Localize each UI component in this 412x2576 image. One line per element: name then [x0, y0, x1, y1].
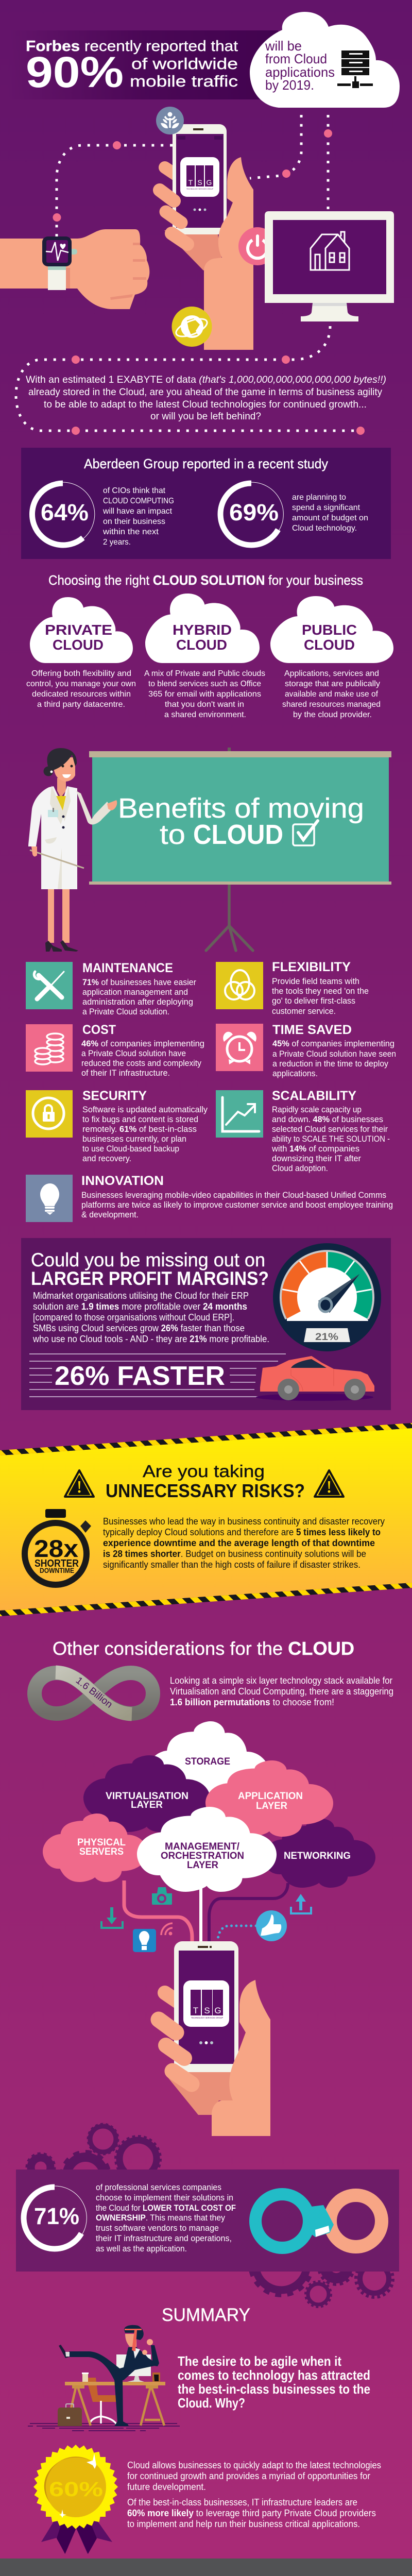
phone with TSG logo: TECHNOLOGY SERVICES GROUP [186, 188, 213, 190]
cloud: public [270, 596, 393, 663]
icon: infinity 1.6 billion [35, 1672, 153, 1714]
text: summary question: the best-in-class businesses to the [178, 2381, 370, 2397]
icon: globe [172, 307, 212, 347]
icon: coin stacks [35, 1033, 63, 1064]
cloud: networking: NETWORKING [284, 1851, 351, 1861]
text: 64% detail: within the next [102, 528, 159, 536]
cloud: networking [263, 1819, 375, 1888]
illustration: red car [256, 1356, 374, 1401]
benefit: scalability: and down. 48% of businesses [272, 1114, 383, 1124]
icon: stopwatch 28x: DOWNTIME [40, 1566, 74, 1574]
text: cost of ownership: OWNERSHIP. This means that they [96, 2213, 225, 2223]
intro paragraph: to be able to adapt to the latest Cloud technologies for continued growth... [44, 399, 367, 410]
text: risks paragraph: significantly smaller than the high costs of failure if disaster strikes. [103, 1560, 360, 1570]
text: summary detail: future development. [127, 2482, 206, 2492]
benefit: innovation: & development. [81, 1210, 139, 1219]
cloud: private: PRIVATE [45, 622, 112, 638]
benefit: cost: COST [82, 1023, 116, 1037]
text: hybrid cloud description: 365 for email with applications [148, 690, 261, 699]
icon: smartwatch [42, 236, 77, 290]
projector screen: benefits of moving to cloud: CLOUD [193, 819, 283, 850]
icon: server [337, 50, 373, 88]
panel: larger profit margins [21, 1238, 391, 1410]
icon: stopwatch 28x [25, 1509, 91, 1585]
projector screen: benefits of moving to cloud: Benefits of moving [118, 793, 364, 824]
text: cost of ownership: of professional services companies [96, 2182, 221, 2192]
header cloud with text and server icon: will be [265, 38, 302, 54]
icon: thumbs up [256, 1910, 287, 1941]
intro paragraph [26, 374, 386, 422]
benefit: time saved: applications. [272, 1069, 318, 1078]
text: cost of ownership: choose to implement their solutions in [96, 2193, 233, 2202]
hazard stripe top [0, 1423, 412, 1455]
text: private cloud description: control, you manage your own [26, 680, 136, 688]
icon: growth chart [222, 1097, 259, 1131]
benefit: innovation: platforms are twice as likely to improve customer service and boost employee training [81, 1200, 393, 1210]
text: public cloud description: shared resources managed [282, 700, 381, 709]
benefit: time saved: a Private Cloud solution have seen [272, 1049, 396, 1059]
monitor with house icon [265, 211, 394, 321]
blue dotted connector [218, 1926, 256, 1941]
panel: Aberdeen Group study: 69% [229, 499, 279, 526]
benefit: time saved: 45% of companies implementing [272, 1039, 394, 1048]
text: hybrid cloud description: that you don't want in [165, 700, 244, 709]
phone with TSG logo: S [204, 2006, 210, 2015]
text: public cloud description: Applications, services and [284, 669, 379, 678]
text: risks paragraph: experience downtime and the average length of that downtime [103, 1538, 375, 1548]
heading: Are you taking [143, 1462, 265, 1481]
icon: camera [152, 1887, 172, 1905]
text: hybrid cloud description [144, 669, 265, 719]
text: profit margin statistics: Midmarket organisations utilising the Cloud for their ERP [33, 1291, 249, 1301]
icon: wrench and screwdriver [34, 972, 64, 999]
panel: lower total cost of ownership [16, 2170, 399, 2272]
text: 64% detail: 2 years. [103, 538, 131, 547]
benefit: time saved [216, 1023, 396, 1078]
phone with TSG logo [174, 1941, 238, 2072]
benefit: scalability: with 14% of companies [271, 1144, 359, 1154]
text: hybrid cloud description: to blend services such as Office [148, 680, 261, 688]
cloud: hybrid: HYBRID [173, 622, 232, 638]
heading: choosing the right cloud solution: Choosing the right CLOUD SOLUTION for your business [48, 572, 363, 588]
callout: 26% faster: 26% FASTER [55, 1361, 225, 1391]
panel: larger profit margins: LARGER PROFIT MARGINS? [31, 1268, 269, 1289]
icon: house [311, 232, 349, 270]
benefit: maintenance: 71% of businesses have easier [82, 977, 196, 987]
icon: warning triangle right [315, 1470, 344, 1497]
icon: 60% award badge [33, 2445, 118, 2554]
benefit: flexibility [216, 960, 369, 1016]
text: six layer stack: 1.6 billion permutations to choose from! [170, 1697, 334, 1707]
cloud: public: CLOUD [304, 637, 355, 653]
hand holding phone: stack illustration [159, 1941, 270, 2136]
icon: infinity 1.6 billion: 1.6 Billion [74, 1675, 114, 1710]
text: summary question: comes to technology has attracted [178, 2367, 370, 2383]
benefit: scalability: downsizing their IT after [272, 1154, 361, 1163]
man [114, 2379, 129, 2426]
decorative gears above panel [27, 2124, 160, 2199]
text: summary question: The desire to be agile when it [178, 2353, 341, 2369]
benefit: security: businesses currently, or plan [82, 1134, 186, 1144]
icon: stopwatch 28x: SHORTER [35, 1558, 79, 1569]
benefit: security: to fix bugs and content is stored [82, 1114, 198, 1124]
text: 64% detail: of CIOs think that [103, 486, 166, 495]
text: profit margin statistics [32, 1291, 269, 1344]
intro paragraph: already stored in the Cloud, are you ahead of the game in terms of business agility [28, 386, 382, 398]
benefit: scalability [216, 1089, 390, 1173]
icon: checkbox [293, 821, 318, 845]
icon: alarm clock [223, 1032, 256, 1064]
icon: tree badge [156, 107, 184, 134]
benefit: scalability: selected Cloud services for their [272, 1124, 388, 1134]
icon: warning triangle left [65, 1470, 94, 1497]
heading: Aberdeen Group reported in a recent study [84, 456, 328, 471]
cloud: virtualisation layer: VIRTUALISATION [106, 1791, 188, 1802]
footer [0, 2558, 412, 2576]
phone with TSG logo: TECHNOLOGY SERVICES GROUP [191, 2016, 223, 2019]
pink connector nodes [53, 129, 365, 435]
benefit: cost: a Private Cloud solution have [81, 1048, 186, 1058]
benefit: security: to use Cloud-based backup [82, 1144, 179, 1154]
text: six layer stack: Looking at a simple six layer technology stack available for [170, 1675, 392, 1686]
text: 69% detail: amount of budget on [292, 514, 368, 522]
icon: interlocking rings [225, 970, 254, 999]
cloud: virtualisation layer: LAYER [131, 1800, 163, 1810]
text: profit margin statistics: solution are 1.9 times more profitable over 24 months [33, 1301, 247, 1312]
text: six layer stack [170, 1675, 393, 1707]
donut: 71% [24, 2186, 87, 2249]
text: 69% detail: are planning to [292, 493, 346, 502]
text: risks paragraph [103, 1516, 385, 1570]
benefit: security: Software is updated automatically [82, 1105, 208, 1114]
text: 64% detail: on their business [103, 517, 165, 526]
text: cost of ownership: trust software vendors to manage [96, 2223, 219, 2233]
headline: Forbes statistic: 90% [26, 48, 124, 96]
speedometer gauge: 21% [315, 1332, 338, 1343]
decorative gears below panel [250, 2233, 393, 2307]
cloud: management orchestration layer: ORCHESTRATION [161, 1851, 244, 1861]
benefit: cost: 46% of companies implementing [81, 1039, 204, 1048]
benefit: innovation: INNOVATION [81, 1174, 164, 1188]
cloud: physical servers: PHYSICAL [77, 1837, 126, 1848]
text: risks paragraph: typically deploy Cloud solutions and therefore are 5 times less likely to [103, 1527, 381, 1537]
cloud: virtualisation layer [83, 1755, 210, 1832]
benefit: scalability: ability to SCALE THE SOLUTION - [272, 1134, 390, 1144]
text: 64% detail: will have an impact [102, 507, 173, 516]
benefit: scalability: Rapidly scale capacity up [272, 1105, 362, 1114]
text: six layer stack: Virtualisation and Cloud Computing, there are a staggering [170, 1686, 393, 1697]
benefit: cost: reduced the costs and complexity [81, 1058, 201, 1068]
phone with TSG logo: G [214, 2006, 221, 2015]
benefit: innovation: Businesses leveraging mobile-video capabilities in their Cloud-based Unified Comms [81, 1190, 386, 1200]
icon: power button [238, 227, 277, 265]
icon: padlock [33, 1098, 64, 1129]
illustration: woman presenter [28, 748, 117, 952]
projector screen: benefits of moving to cloud: to [160, 819, 185, 850]
panel: unnecessary risks: UNNECESSARY RISKS? [106, 1480, 305, 1501]
intro paragraph: With an estimated 1 EXABYTE of data (that's 1,000,000,000,000,000,000 bytes!!) [26, 374, 386, 385]
cloud: management orchestration layer: MANAGEMENT/ [165, 1841, 240, 1852]
text: 64% detail: CLOUD COMPUTING [103, 497, 174, 505]
headline: Forbes statistic [26, 38, 238, 96]
cloud: storage: STORAGE [185, 1756, 230, 1767]
text: hybrid cloud description: a shared environment. [164, 710, 246, 719]
cloud: private: CLOUD [53, 637, 104, 653]
cloud: storage [146, 1721, 270, 1819]
speed lines [29, 1354, 286, 1397]
panel: Aberdeen Group study [21, 448, 391, 559]
benefit: flexibility: go' to deliver first-class [272, 996, 355, 1006]
headline: Forbes statistic: Forbes recently reported that [26, 38, 238, 55]
cloud: application layer [205, 1760, 333, 1837]
heading: Could you be missing out on [31, 1249, 265, 1270]
benefit: cost [26, 1023, 204, 1078]
text: public cloud description: available and make use of [285, 690, 379, 699]
headline: Forbes statistic: of worldwide [131, 55, 238, 73]
text: summary detail [127, 2460, 381, 2529]
benefit: security: and recovery. [82, 1154, 131, 1163]
phone with TSG logo: T [193, 2006, 198, 2015]
speedometer gauge [273, 1243, 381, 1351]
benefit: maintenance: administration after deploying [82, 997, 193, 1007]
benefit: cost: of their IT infrastructure. [81, 1068, 170, 1078]
icon: 60% award badge: 60% [49, 2478, 103, 2501]
benefit: maintenance: MAINTENANCE [82, 961, 173, 975]
phone with TSG logo: T [188, 178, 193, 187]
text: summary detail: 60% more likely to leverage third party Private Cloud providers [127, 2508, 376, 2518]
text: private cloud description: a third party datacentre. [37, 700, 125, 709]
text: 69% detail: Cloud technology. [292, 524, 357, 533]
header band [8, 30, 278, 99]
briefcase [58, 2408, 82, 2426]
text: profit margin statistics: [compared to those organisations without Cloud ERP]. [33, 1312, 234, 1323]
icon: linked rings handshake [255, 2194, 382, 2248]
benefit: flexibility: FLEXIBILITY [272, 960, 351, 974]
text: cost of ownership [96, 2182, 236, 2253]
icon: stopwatch 28x: 28x [34, 1535, 78, 1562]
benefit: flexibility: customer service. [272, 1006, 336, 1016]
benefit: security [26, 1089, 208, 1163]
donut: 64% [32, 482, 95, 545]
benefit: flexibility: the tools they need 'on the [272, 986, 369, 996]
benefit: maintenance: a Private Cloud solution. [82, 1007, 169, 1016]
heading: summary: SUMMARY [162, 2305, 250, 2325]
benefit: scalability: Cloud adoption. [272, 1163, 328, 1173]
cloud: private [30, 597, 133, 663]
text: public cloud description [282, 669, 381, 719]
illustration: man kicking at desk [28, 2325, 180, 2431]
benefit: security: SECURITY [82, 1089, 147, 1103]
panel: lower total cost of ownership: 71% [34, 2203, 79, 2229]
text: summary detail: for continued growth and provides a myriad of opportunities for [127, 2471, 370, 2481]
cloud: physical servers [43, 1814, 147, 1882]
heading: other considerations: Other considerations for the CLOUD [53, 1638, 354, 1659]
text: private cloud description: Offering both flexibility and [31, 669, 131, 678]
text: summary detail: to implement and help run their business critical applications. [127, 2519, 360, 2529]
phone with TSG logo [173, 124, 227, 234]
dotted connector lines [16, 115, 360, 431]
text: 64% detail [102, 486, 174, 547]
benefit: flexibility: Provide field teams with [272, 976, 359, 986]
benefit: security: remotely. 61% of best-in-class [82, 1124, 197, 1134]
icon: light bulb tile [133, 1929, 156, 1952]
cloud: hybrid: CLOUD [176, 637, 227, 653]
text: private cloud description: dedicated resources within [32, 690, 131, 699]
benefit: time saved: a reduction in the time to deploy [272, 1059, 388, 1069]
text: summary detail: Of the best-in-class businesses, IT infrastructure leaders are [127, 2497, 357, 2507]
text: hybrid cloud description: A mix of Private and Public clouds [144, 669, 265, 678]
connector lines from clouds to phone [124, 1880, 288, 1942]
projector screen: benefits of moving to cloud [89, 748, 391, 951]
cloud: application layer: LAYER [256, 1801, 287, 1811]
header cloud with text and server icon: by 2019. [265, 77, 314, 93]
benefit: scalability: SCALABILITY [272, 1089, 356, 1103]
header cloud with text and server icon [250, 12, 400, 108]
text: 69% detail: spend a significant [292, 503, 360, 512]
header cloud with text and server icon: applications [265, 64, 335, 80]
benefit: maintenance: application management and [82, 987, 188, 997]
text: summary question [178, 2353, 370, 2411]
panel: Aberdeen Group study: 64% [41, 499, 89, 526]
text: cost of ownership: their IT infrastructure and operations, [96, 2233, 232, 2243]
text: public cloud description: by the cloud provider. [293, 710, 372, 719]
icon: wifi [161, 1923, 173, 1935]
text: cost of ownership: as well as the application. [96, 2244, 187, 2253]
hazard stripe bottom [0, 1583, 412, 1616]
cloud cluster: technology stack layers [43, 1721, 375, 1892]
text: summary question: Cloud. Why? [178, 2395, 245, 2411]
text: public cloud description: storage that are publically [285, 680, 380, 688]
hand with smartwatch [0, 229, 149, 309]
panel: unnecessary risks [0, 1423, 412, 1616]
text: private cloud description [26, 669, 136, 709]
intro paragraph: or will you be left behind? [150, 411, 261, 422]
text: 69% detail [292, 493, 368, 533]
benefit: time saved: TIME SAVED [272, 1023, 352, 1037]
text: profit margin statistics: SMBs using Cloud services grow 26% faster than those [33, 1323, 245, 1333]
text: risks paragraph: Businesses who lead the way in business continuity and disaster recovery [103, 1516, 385, 1527]
benefit: innovation [26, 1174, 393, 1222]
headline: Forbes statistic: mobile traffic [130, 72, 238, 90]
phone with TSG logo: S [197, 178, 202, 187]
header cloud with text and server icon: from Cloud [265, 51, 327, 66]
cloud: physical servers: SERVERS [79, 1846, 124, 1857]
cloud: public: PUBLIC [302, 622, 357, 638]
icon: download arrow [101, 1907, 123, 1928]
cloud: application layer: APPLICATION [238, 1791, 303, 1802]
hand holding phone [160, 124, 253, 350]
donut: 69% [220, 482, 283, 545]
icon: upload arrow [291, 1894, 311, 1913]
text: cost of ownership: the Cloud for LOWER TOTAL COST OF [96, 2203, 236, 2213]
phone with TSG logo: G [207, 178, 212, 187]
text: summary detail: Cloud allows businesses to quickly adapt to the latest technologies [127, 2460, 381, 2470]
cloud: management orchestration layer [137, 1807, 277, 1892]
icon: light bulb [40, 1183, 59, 1215]
cloud: management orchestration layer: LAYER [187, 1860, 218, 1871]
cloud: hybrid [145, 594, 260, 663]
benefit: maintenance [26, 961, 196, 1016]
text: profit margin statistics: who use no Cloud tools - AND - they are 21% more profitable. [32, 1334, 269, 1344]
text: risks paragraph: is 28 times shorter. Budget on business continuity solutions will be [103, 1549, 366, 1559]
